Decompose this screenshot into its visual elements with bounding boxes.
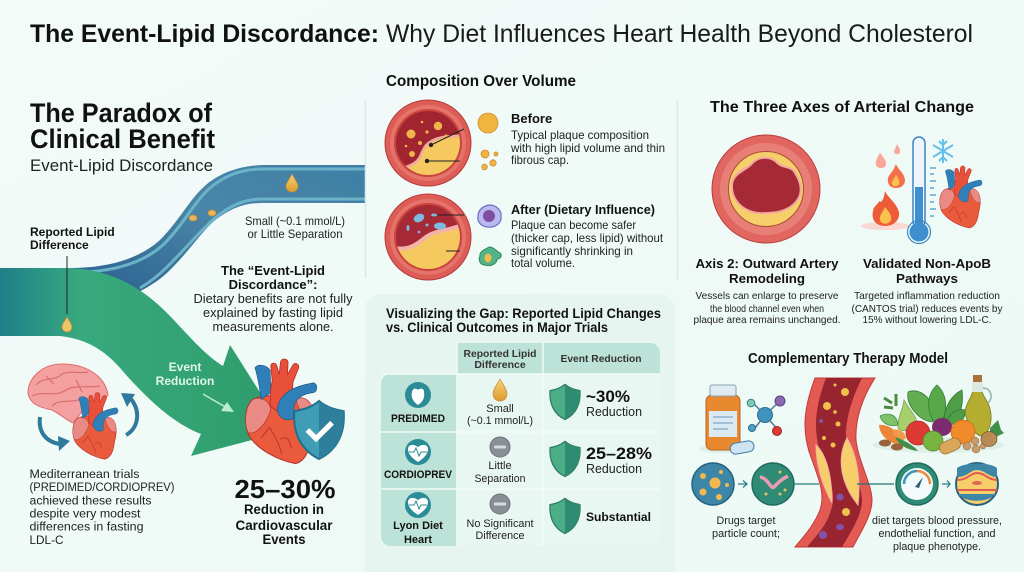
table header: Difference: [474, 359, 526, 371]
title: [30, 20, 973, 48]
heading: complementary therapy: Complementary Therapy Model: [748, 351, 948, 367]
stat: 25-30% reduction: [234, 474, 336, 547]
text: before: fibrous cap.: [511, 153, 569, 167]
stat: 25-30% reduction: Reduction in: [244, 502, 324, 517]
panel: complementary therapy model: [692, 351, 1004, 553]
artery: after: [385, 194, 471, 280]
stat: 25-30% reduction: Cardiovascular: [236, 518, 333, 533]
text: axis 2: Remodeling: [729, 271, 805, 286]
lipid difference: little: Little: [488, 460, 512, 472]
label: event reduction: [156, 360, 234, 412]
text: non-apob pathways: Targeted inflammation reduction: [854, 290, 1000, 302]
text: after: total volume.: [511, 256, 575, 270]
heading: paradox: Clinical Benefit: [30, 124, 215, 154]
outcome: substantial: [550, 498, 651, 534]
outcome: 30%: [550, 384, 642, 420]
title: Why Diet Influences Heart Health Beyond Cholesterol: [386, 20, 973, 48]
text: before: with high lipid volume and thin: [510, 141, 665, 155]
text: mediterranean trials: despite very modest: [30, 506, 141, 520]
label: event reduction: Reduction: [156, 374, 214, 388]
label: reported lipid difference: Reported Lipid: [30, 225, 115, 239]
table header: Event Reduction: [560, 353, 642, 365]
text: diet targets: endothelial function, and: [878, 528, 996, 540]
text: after: Plaque can become safer: [511, 218, 636, 232]
text: mediterranean trials: (PREDIMED/CORDIOPREV): [30, 480, 174, 494]
icon: brain and heart: [28, 364, 137, 459]
icon: heart: [940, 166, 982, 228]
panel: composition over volume: [385, 73, 665, 280]
table header: Reported Lipid: [464, 348, 536, 360]
artery: outward remodeling: [712, 135, 820, 243]
label: event reduction: Event: [169, 360, 201, 374]
lipid difference: none: No Significant: [466, 518, 534, 530]
lipid difference: none: [466, 494, 534, 542]
text: diet targets: [872, 515, 1002, 553]
icon: particle count circles: [692, 463, 819, 505]
callout: event-lipid discordance: explained by fasting lipid: [203, 306, 343, 320]
outcome: 30%: ~30%: [586, 387, 630, 406]
outcome: 25-28%: 25–28%: [586, 444, 652, 463]
green event reduction arrow: [0, 268, 268, 456]
lipid difference: little: [474, 437, 526, 485]
text: after: After (Dietary Influence): [511, 202, 655, 217]
title: The Event-Lipid Discordance:: [30, 20, 379, 48]
artery: before: [385, 100, 471, 186]
text: after: significantly shrinking in: [511, 244, 633, 258]
icon: artery cross-section: [795, 378, 894, 547]
text: after: (thicker cap, less lipid) without: [511, 231, 664, 245]
icon: heartbeat badge: [405, 439, 431, 465]
heading: visualizing the gap: [386, 305, 661, 335]
label: reported lipid difference: [30, 225, 115, 332]
callout: event-lipid discordance: [194, 263, 353, 334]
outcome: 25-28%: [550, 441, 652, 477]
lipid difference: none: Difference: [476, 530, 524, 542]
label: lyon diet heart: [393, 520, 443, 546]
icon: lipid particles: [478, 113, 498, 170]
heading: paradox: Event-Lipid Discordance: [30, 156, 213, 175]
icon: healthy food: [872, 375, 1004, 456]
label: small separation: or Little Separation: [248, 227, 342, 241]
callout: event-lipid discordance: The “Event-Lipid: [221, 263, 325, 278]
text: mediterranean trials: differences in fasting: [30, 520, 144, 534]
text: before: [510, 111, 665, 167]
text: axis 2: Vessels can enlarge to preserve: [696, 290, 839, 302]
panel: visualizing the gap: [365, 294, 675, 572]
icon: blood pressure gauge and plaque: [896, 463, 998, 505]
icon: immune cells: [478, 205, 501, 266]
icon: flames: [861, 144, 909, 230]
lipid difference: little: Separation: [474, 473, 526, 485]
text: axis 2: Axis 2: Outward Artery: [696, 256, 839, 271]
stat: 25-30% reduction: 25–30%: [234, 474, 336, 504]
text: non-apob pathways: [852, 256, 1003, 326]
text: axis 2: the blood channel even when: [710, 303, 824, 315]
row: lyon diet heart: [393, 492, 651, 546]
row: cordioprev: [384, 437, 652, 485]
outcome: 25-28%: Reduction: [586, 462, 642, 476]
label: predimed: PREDIMED: [391, 413, 445, 425]
text: diet targets: plaque phenotype.: [893, 541, 981, 553]
text: diet targets: diet targets blood pressure,: [872, 515, 1002, 527]
callout: event-lipid discordance: Dietary benefits are not fully: [194, 292, 353, 306]
callout: event-lipid discordance: measurements alone.: [212, 320, 334, 334]
icon: snowflake: [933, 139, 953, 163]
label: small separation: [245, 214, 345, 241]
text: after: [511, 202, 664, 270]
heading: three axes: The Three Axes of Arterial Change: [710, 99, 974, 116]
label: reported lipid difference: Difference: [30, 238, 89, 252]
callout: event-lipid discordance: Discordance”:: [229, 277, 317, 292]
text: non-apob pathways: 15% without lowering LDL-C.: [862, 314, 992, 326]
lipid difference: small: [467, 379, 533, 427]
row: predimed: [391, 379, 642, 427]
text: mediterranean trials: achieved these results: [30, 494, 152, 508]
text: mediterranean trials: LDL-C: [30, 533, 64, 547]
text: drugs target: Drugs target: [716, 515, 776, 527]
outcome: 30%: Reduction: [586, 405, 642, 419]
label: lyon diet heart: Lyon Diet: [393, 520, 443, 532]
heading: visualizing the gap: Visualizing the Gap: Reported Lipid Changes: [386, 305, 661, 321]
icon: heart with shield: [246, 359, 344, 464]
heading: paradox: [30, 98, 215, 175]
icon: heart badge: [405, 382, 431, 408]
text: before: Before: [511, 111, 552, 126]
panel: three axes of arterial change: [694, 99, 1003, 326]
text: mediterranean trials: [30, 467, 174, 547]
text: drugs target: particle count;: [712, 528, 780, 540]
heading: paradox: The Paradox of: [30, 98, 213, 128]
icon: thermometer: [908, 137, 936, 244]
lipid droplets on band: [189, 174, 298, 221]
icon: heartbeat badge: [405, 492, 431, 518]
icon: inflammation thermometer and heart: [861, 137, 982, 244]
table grid: [381, 343, 660, 546]
outcome: substantial: Substantial: [586, 510, 651, 524]
label: cordioprev: CORDIOPREV: [384, 469, 453, 481]
text: before: Typical plaque composition: [511, 128, 649, 142]
stat: 25-30% reduction: Events: [262, 532, 306, 547]
heading: composition: Composition Over Volume: [386, 73, 576, 90]
text: axis 2: [694, 256, 840, 326]
blue lipid band: [70, 165, 365, 293]
text: non-apob pathways: Pathways: [896, 271, 958, 286]
heading: visualizing the gap: vs. Clinical Outcomes in Major Trials: [386, 319, 608, 335]
panel: paradox of clinical benefit: [0, 98, 365, 547]
label: lyon diet heart: Heart: [404, 534, 432, 546]
table header: [464, 348, 642, 371]
label: small separation: Small (~0.1 mmol/L): [245, 214, 345, 228]
lipid difference: small: Small: [486, 403, 514, 415]
text: drugs target: [712, 515, 780, 540]
text: mediterranean trials: Mediterranean trials: [30, 467, 140, 481]
text: non-apob pathways: Validated Non-ApoB: [863, 256, 991, 271]
text: axis 2: plaque area remains unchanged.: [694, 314, 840, 326]
text: non-apob pathways: (CANTOS trial) reduces events by: [852, 303, 1003, 315]
icon: pill bottle and molecule: [699, 385, 785, 455]
lipid difference: small: (~0.1 mmol/L): [467, 415, 533, 427]
